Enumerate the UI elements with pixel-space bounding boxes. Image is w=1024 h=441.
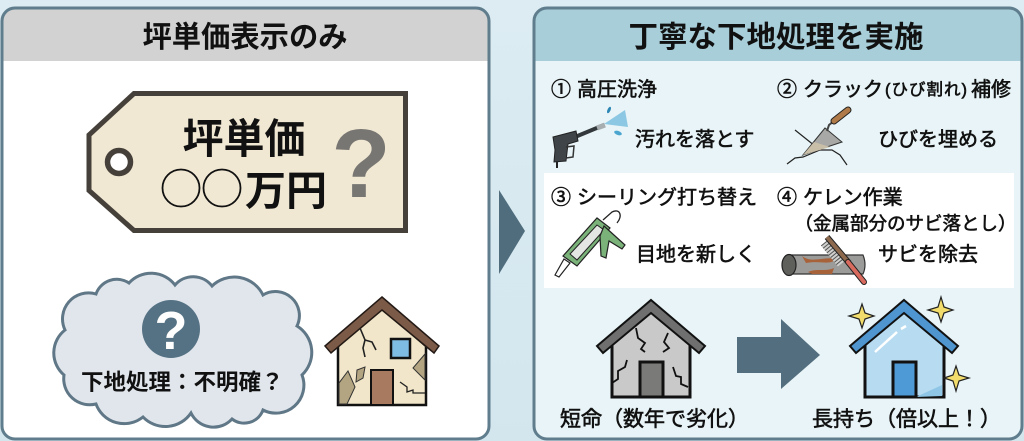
step 4: rust removal: ケレン作業 — [803, 186, 903, 209]
heading: price-only display: 坪単価表示のみ — [142, 21, 348, 54]
long-life outcome — [812, 297, 1001, 431]
step 2: crack repair: (ひび割れ) — [885, 80, 968, 99]
arrow: short life to long life — [737, 319, 820, 389]
icon: cracked grey house — [597, 300, 705, 397]
panel: price-only display — [2, 8, 489, 439]
icon: shiny blue house — [850, 300, 958, 397]
step 2: crack repair: クラック — [803, 78, 883, 101]
sparkles — [849, 297, 969, 391]
icon: pressure washer — [553, 106, 628, 168]
arrow: left to right — [499, 190, 525, 274]
step 3: re-sealing — [551, 186, 757, 277]
step 1: high-pressure washing — [551, 78, 754, 168]
price tag: 坪単価 — [182, 116, 306, 162]
step 3: re-sealing: 目地を新しく — [636, 243, 756, 266]
panel: thorough substrate treatment — [534, 8, 1022, 439]
price tag: 万円 — [245, 168, 327, 214]
short-life outcome — [560, 300, 749, 431]
cloud: unclear substrate treatment: ? — [154, 301, 188, 361]
cloud: unclear substrate treatment: 下地処理：不明確？ — [81, 370, 284, 395]
icon: wire brush on rusty pipe — [782, 237, 865, 282]
step 2: crack repair: ② — [777, 78, 797, 101]
step 4: rust removal: サビを除去 — [878, 243, 978, 266]
long-life outcome: 長持ち（倍以上！） — [812, 408, 1001, 431]
short-life outcome: 短命（数年で劣化） — [560, 408, 749, 431]
step 1: high-pressure washing: 高圧洗浄 — [577, 78, 657, 101]
icon: trowel on crack — [787, 110, 848, 165]
step 4: rust removal: （金属部分のサビ落とし） — [794, 213, 1017, 234]
cloud: unclear substrate treatment — [54, 273, 312, 427]
step 2: crack repair: ひびを埋める — [878, 128, 998, 151]
step 4: rust removal: ④ — [777, 186, 797, 209]
price tag — [89, 94, 406, 230]
step 2: crack repair: 補修 — [971, 78, 1011, 101]
step 4: rust removal — [777, 186, 1017, 282]
icon: caulking gun — [555, 211, 625, 277]
step 1: high-pressure washing: ① — [551, 78, 571, 101]
heading: thorough substrate treatment: 丁寧な下地処理を実施 — [628, 21, 924, 54]
icon: cracked beige house — [325, 297, 439, 405]
step 2: crack repair — [777, 78, 1011, 165]
step 3: re-sealing: ③ — [551, 186, 571, 209]
price tag: ? — [331, 109, 391, 218]
step 3: re-sealing: シーリング打ち替え — [577, 186, 757, 209]
step 1: high-pressure washing: 汚れを落とす — [635, 128, 754, 151]
